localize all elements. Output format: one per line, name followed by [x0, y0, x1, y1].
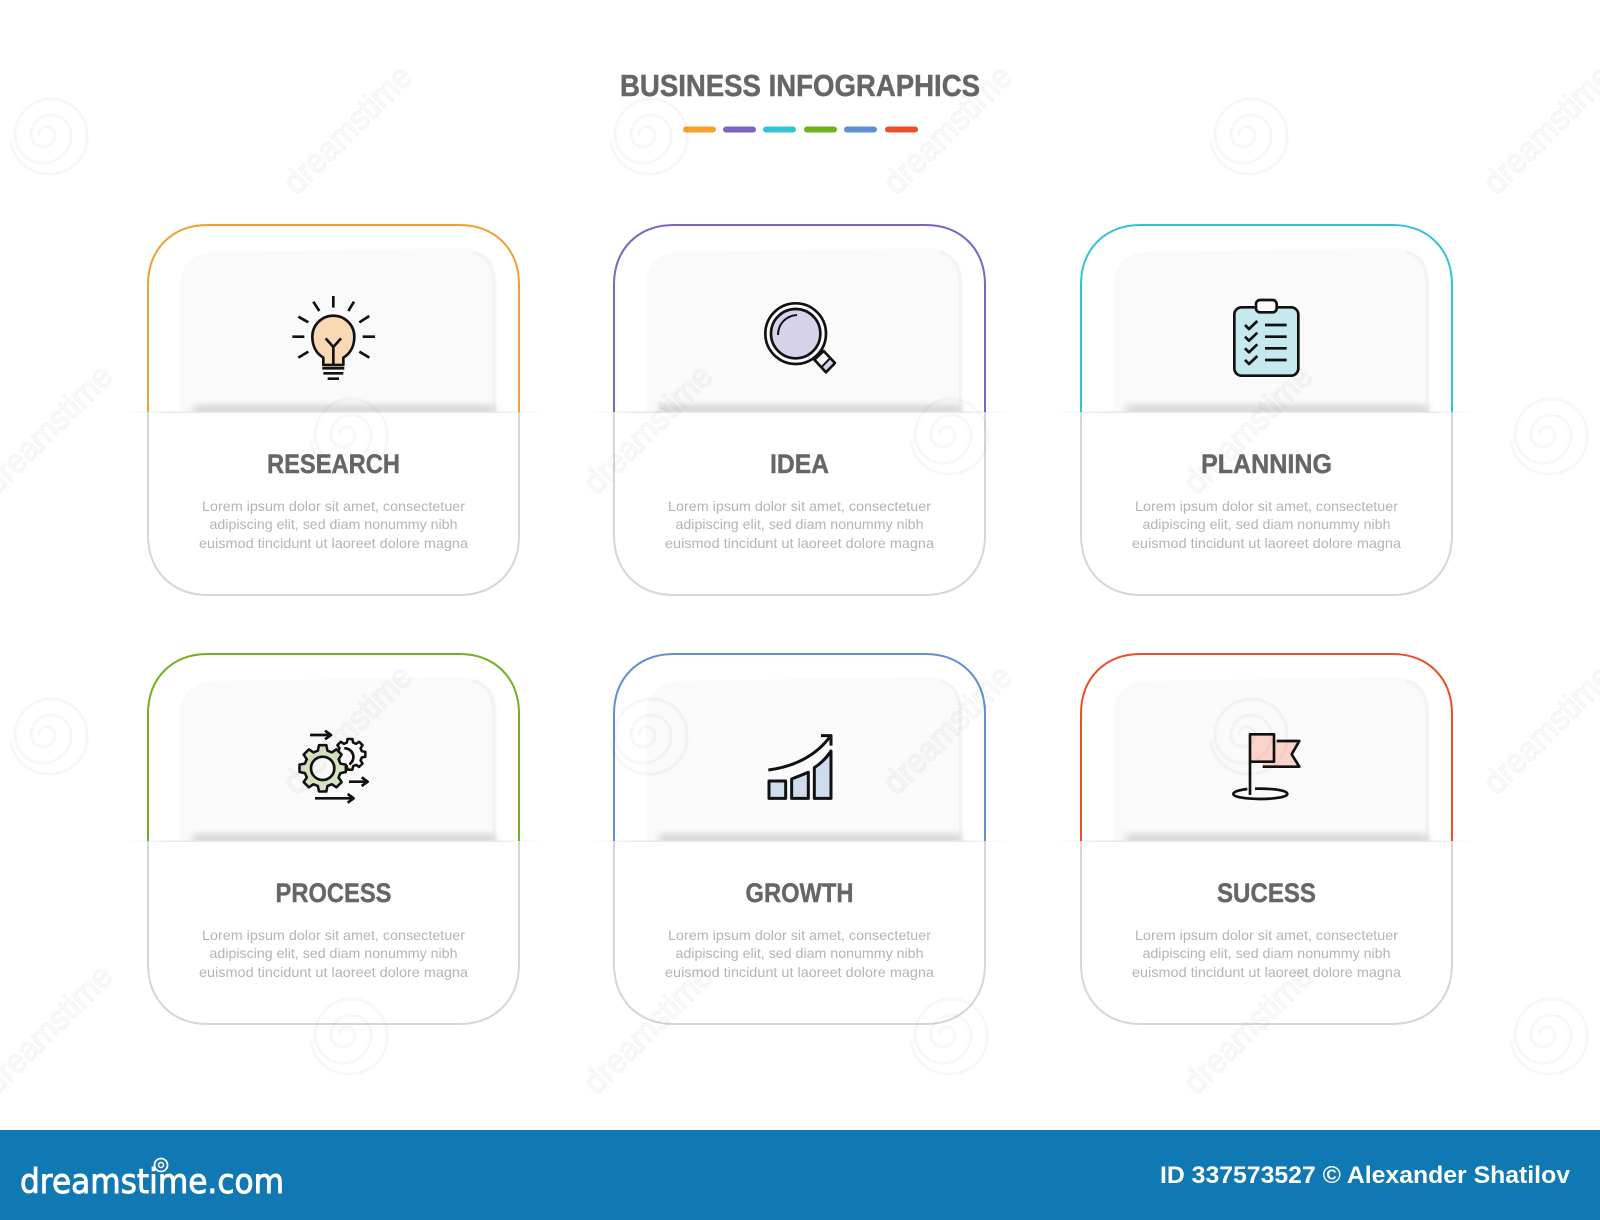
panel: process	[120, 654, 547, 1024]
text: growth	[665, 927, 934, 980]
watermark text: dreamstime	[276, 57, 420, 202]
icon: growth chart	[768, 736, 831, 798]
watermark text: dreamstime	[1176, 957, 1320, 1102]
icon: magnifier	[765, 303, 835, 372]
watermark text: dreamstime	[1176, 357, 1320, 502]
footer credit: ID 337573527 © Alexander Shatilov	[1160, 1162, 1571, 1189]
heading: growth: GROWTH	[746, 878, 854, 908]
text: research	[199, 498, 468, 551]
text: growth: Lorem ipsum dolor sit amet, consectetuer	[668, 927, 931, 943]
text: planning: euismod tincidunt ut laoreet dolore magna	[1132, 535, 1401, 551]
text: sucess: Lorem ipsum dolor sit amet, consectetuer	[1135, 927, 1398, 943]
heading: sucess: SUCESS	[1217, 878, 1316, 908]
heading: planning: PLANNING	[1201, 449, 1332, 479]
text: process: adipiscing elit, sed diam nonummy nibh	[210, 945, 458, 961]
watermark text: dreamstime	[876, 657, 1020, 802]
icon: light bulb	[292, 296, 375, 379]
watermark spirals	[11, 99, 1587, 1074]
text: growth: euismod tincidunt ut laoreet dolore magna	[665, 964, 934, 980]
text: growth: adipiscing elit, sed diam nonummy nibh	[676, 945, 924, 961]
footer banner	[0, 1130, 1600, 1220]
title colour dashes	[683, 126, 918, 132]
panel: idea	[586, 225, 1013, 595]
icon: clipboard checklist	[1234, 300, 1298, 376]
watermark text: dreamstime	[576, 357, 720, 502]
footer logo: dreamstime.com	[20, 1162, 284, 1202]
watermark text: dreamstime	[576, 957, 720, 1102]
panel: research	[120, 225, 547, 595]
text: research: adipiscing elit, sed diam nonummy nibh	[210, 516, 458, 532]
text: planning: adipiscing elit, sed diam nonummy nibh	[1142, 516, 1390, 532]
text: sucess: euismod tincidunt ut laoreet dolore magna	[1132, 964, 1401, 980]
heading: idea: IDEA	[770, 449, 829, 479]
icon: gears and arrows	[300, 731, 368, 803]
panel: sucess	[1053, 654, 1480, 1024]
text: planning	[1132, 498, 1401, 551]
heading: research: RESEARCH	[267, 449, 400, 479]
text: process	[199, 927, 468, 980]
text: sucess	[1132, 927, 1401, 980]
watermark text: dreamstime	[276, 657, 420, 802]
text: research: Lorem ipsum dolor sit amet, consectetuer	[202, 498, 465, 514]
text: idea: adipiscing elit, sed diam nonummy nibh	[676, 516, 924, 532]
text: research: euismod tincidunt ut laoreet dolore magna	[199, 535, 468, 551]
text: process: Lorem ipsum dolor sit amet, consectetuer	[202, 927, 465, 943]
title: BUSINESS INFOGRAPHICS	[620, 68, 980, 103]
heading: process: PROCESS	[276, 878, 392, 908]
text: idea: Lorem ipsum dolor sit amet, consectetuer	[668, 498, 931, 514]
text: idea: euismod tincidunt ut laoreet dolore magna	[665, 535, 934, 551]
text: process: euismod tincidunt ut laoreet dolore magna	[199, 964, 468, 980]
text: planning: Lorem ipsum dolor sit amet, consectetuer	[1135, 498, 1398, 514]
icon: flag	[1233, 734, 1299, 799]
panel: growth	[586, 654, 1013, 1024]
text: idea	[665, 498, 934, 551]
panel: planning	[1053, 225, 1480, 595]
text: sucess: adipiscing elit, sed diam nonummy nibh	[1142, 945, 1390, 961]
watermark text: dreamstime	[876, 57, 1020, 202]
